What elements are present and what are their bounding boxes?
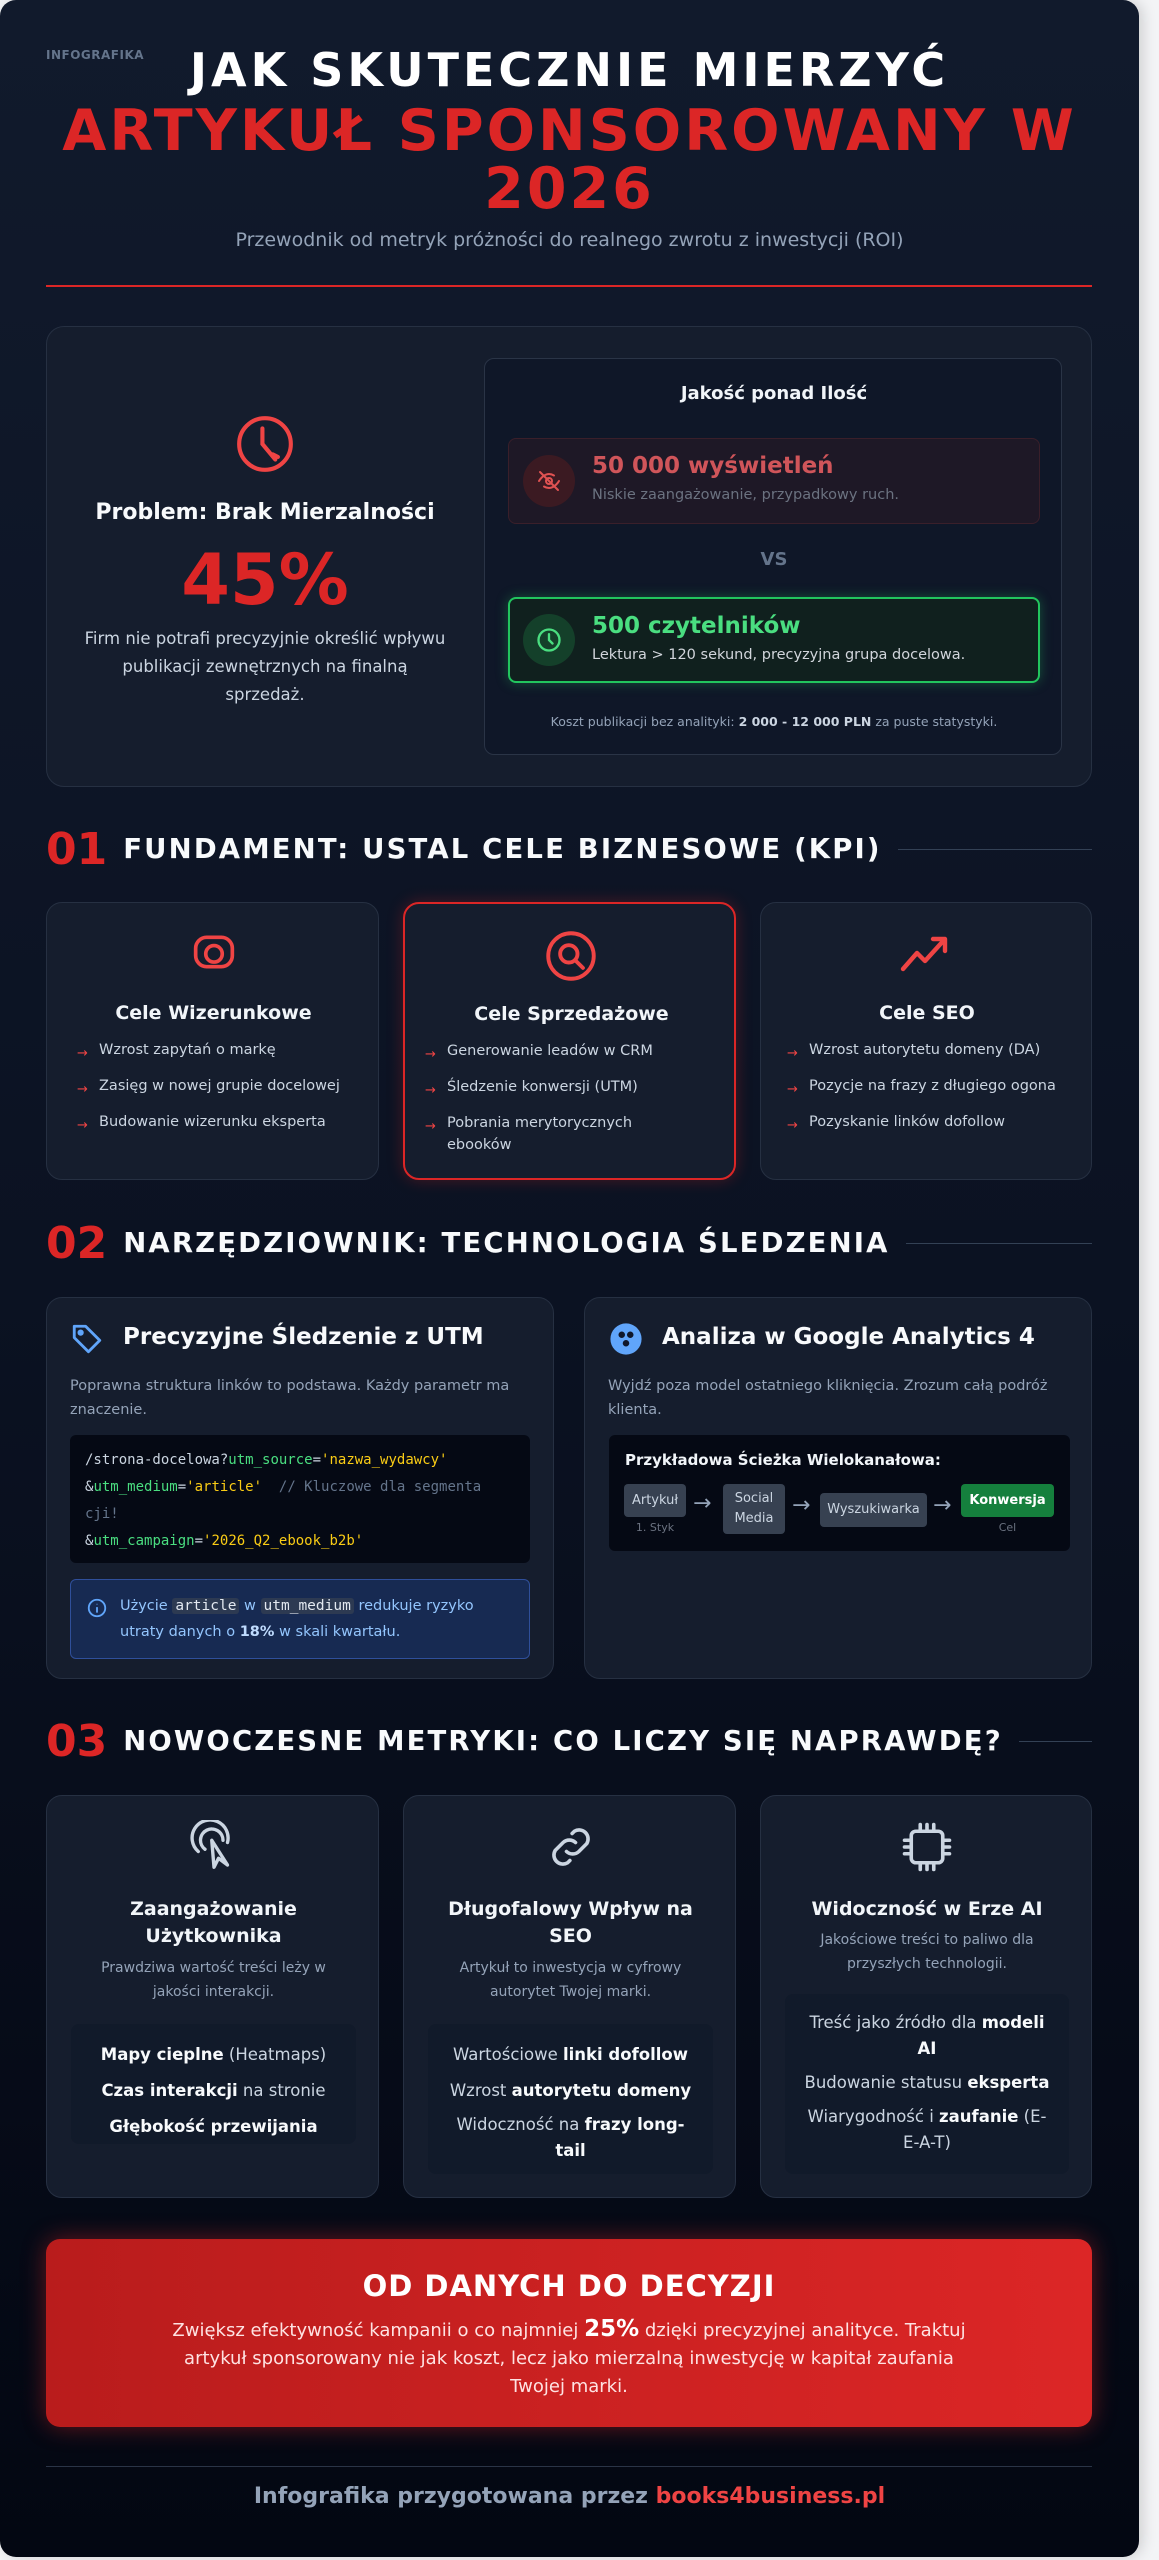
stat 45%: 45% — [181, 539, 349, 621]
path diagram: → — [792, 1493, 810, 1518]
code block: &utm_medium='article' // Kluczowe dla segmenta — [85, 1479, 481, 1495]
icon: eye off — [523, 455, 575, 507]
metric list: Głębokość przewijania — [109, 2117, 318, 2136]
cost note: Koszt publikacji bez analityki: 2 000 - 12 000 PLN za puste statystyki. — [551, 714, 997, 729]
panel: Cele SEO: Cele SEO — [879, 1002, 975, 1024]
callout: CTA — [46, 2239, 1092, 2427]
panel: Cele Wizerunkowe: Budowanie wizerunku eksperta — [99, 1114, 326, 1130]
panel: SEO impact — [403, 1795, 736, 2198]
section heading 03: 03 — [46, 1716, 107, 1766]
panel: Cele Sprzedażowe (highlighted) — [403, 902, 736, 1180]
icon: chip — [902, 1822, 952, 1872]
views box — [508, 438, 1040, 524]
panel: Cele Wizerunkowe — [46, 902, 379, 1180]
panel: UTM — [46, 1297, 554, 1679]
panel: AI visibility: Widoczność w Erze AI — [811, 1898, 1043, 1920]
panel: Zaangażowanie: Zaangażowanie Użytkownika — [130, 1898, 297, 1947]
panel: Zaangażowanie — [46, 1795, 379, 2198]
path diagram — [609, 1435, 1070, 1551]
panel: AI visibility: Jakościowe treści to paliwo dla przyszłych technologii. — [820, 1932, 1034, 1972]
path diagram: Cel — [999, 1521, 1016, 1534]
code block: &utm_campaign='2026_Q2_ebook_b2b' — [85, 1533, 363, 1549]
section heading 02: 02 — [46, 1218, 107, 1268]
info callout — [70, 1579, 530, 1659]
panel: Cele SEO: Pozyskanie linków dofollow — [809, 1114, 1005, 1130]
path diagram: Przykładowa Ścieżka Wielokanałowa: — [625, 1451, 941, 1469]
subtitle: Przewodnik od metryk próżności do realnego zwrotu z inwestycji (ROI) — [235, 229, 904, 251]
problem heading: Problem: Brak Mierzalności — [95, 500, 435, 525]
path diagram: Media — [734, 1511, 774, 1526]
panel: GA4: Wyjdź poza model ostatniego kliknięcia. Zrozum całą podróż klienta. — [608, 1378, 1048, 1418]
icon: search — [546, 931, 596, 981]
metric list: Wartościowe linki dofollow — [453, 2045, 688, 2064]
icon: pointer click — [190, 1820, 230, 1869]
icon: tag — [72, 1324, 102, 1354]
panel: UTM: Precyzyjne Śledzenie z UTM — [123, 1324, 484, 1350]
panel: SEO impact: Długofalowy Wpływ na SEO — [448, 1898, 693, 1947]
section heading 01: FUNDAMENT: USTAL CELE BIZNESOWE (KPI) — [123, 833, 882, 865]
panel: Zaangażowanie: Prawdziwa wartość treści leży w jakości interakcji. — [101, 1960, 326, 2000]
metric list — [71, 2024, 356, 2144]
problem description: publikacji zewnętrznych na finalną — [122, 657, 408, 676]
panel: Cele Wizerunkowe: Cele Wizerunkowe — [115, 1002, 312, 1024]
path diagram: → — [693, 1491, 711, 1516]
title: 2026 — [484, 156, 655, 222]
section heading 01: 01 — [46, 824, 107, 874]
icon: link — [552, 1828, 590, 1866]
vs: VS — [761, 549, 787, 570]
views box: Niskie zaangażowanie, przypadkowy ruch. — [592, 487, 899, 503]
readers box: 500 czytelników — [592, 613, 800, 639]
panel: Cele SEO: Wzrost autorytetu domeny (DA) — [809, 1042, 1040, 1058]
code block: cji! — [85, 1506, 119, 1522]
panel: Cele SEO: Pozycje na frazy z długiego ogona — [809, 1078, 1056, 1094]
path diagram: Artykuł — [632, 1493, 678, 1508]
metric list: Widoczność na frazy long-tail — [456, 2115, 685, 2160]
metric list: E-A-T) — [903, 2133, 951, 2152]
path diagram: Social — [735, 1491, 773, 1506]
path diagram: Wyszukiwarka — [827, 1502, 920, 1517]
icon: green clock — [523, 614, 575, 666]
metric list: Wzrost autorytetu domeny — [450, 2081, 691, 2100]
icon: trend up — [900, 936, 948, 972]
section heading 01 — [46, 824, 1092, 874]
section heading 02 — [46, 1218, 1092, 1268]
panel: Cele Wizerunkowe: Zasięg w nowej grupie docelowej — [99, 1078, 340, 1094]
comparison heading: Jakość ponad Ilość — [681, 383, 867, 404]
metric list: AI — [918, 2039, 936, 2058]
title: JAK SKUTECZNIE MIERZYĆ — [190, 43, 949, 97]
views box: 50 000 wyświetleń — [592, 453, 834, 479]
metric list: Czas interakcji na stronie — [101, 2081, 326, 2100]
panel: UTM: Poprawna struktura linków to podstawa. Każdy parametr ma znaczenie. — [70, 1378, 509, 1418]
callout: CTA: Zwiększ efektywność kampanii o co najmniej 25% dzięki precyzyjnej analityce. Traktuj artykuł sponsorowany nie jak koszt, lecz jako mierzalną inwestycję w kapitał zaufania Twojej marki. — [172, 2316, 966, 2397]
metric list — [785, 1994, 1069, 2174]
label: INFOGRAFIKA: INFOGRAFIKA — [46, 48, 144, 62]
path diagram: Konwersja — [969, 1493, 1046, 1508]
code block: /strona-docelowa?utm_source='nazwa_wydawcy' — [85, 1452, 447, 1468]
title — [62, 42, 1077, 222]
code block — [70, 1435, 530, 1563]
section heading 03: NOWOCZESNE METRYKI: CO LICZY SIĘ NAPRAWDĘ? — [123, 1725, 1003, 1757]
problem description: sprzedaż. — [225, 685, 305, 704]
problem description — [85, 629, 445, 704]
metric list: Wiarygodność i zaufanie (E- — [808, 2107, 1046, 2126]
section heading 03 — [46, 1716, 1092, 1766]
panel: Cele Wizerunkowe: Wzrost zapytań o markę — [99, 1042, 276, 1058]
info callout: Użycie article w utm_medium redukuje ryzyko utraty danych o 18% w skali kwartału. — [120, 1598, 474, 1640]
panel: Cele Sprzedażowe (highlighted): Śledzenie konwersji (UTM) — [447, 1079, 638, 1095]
metric list: Budowanie statusu eksperta — [805, 2073, 1049, 2092]
icon: analytics — [610, 1323, 642, 1355]
panel: Cele SEO — [760, 902, 1092, 1180]
panel: AI visibility — [760, 1795, 1092, 2198]
section heading 02: NARZĘDZIOWNIK: TECHNOLOGIA ŚLEDZENIA — [123, 1227, 890, 1259]
readers box — [508, 597, 1040, 683]
path diagram: 1. Styk — [636, 1521, 674, 1534]
panel: Cele Sprzedażowe (highlighted): Cele Sprzedażowe — [474, 1003, 669, 1025]
path diagram: → — [933, 1493, 951, 1518]
metric list: Mapy cieplne (Heatmaps) — [101, 2045, 326, 2064]
metric list — [428, 2024, 713, 2174]
problem description: Firm nie potrafi precyzyjnie określić wpływu — [85, 629, 445, 648]
panel: Cele Sprzedażowe (highlighted): Generowanie leadów w CRM — [447, 1043, 653, 1059]
panel: Cele Sprzedażowe (highlighted): Pobrania merytorycznych ebooków — [447, 1115, 632, 1153]
comparison box — [484, 358, 1062, 755]
panel: GA4: Analiza w Google Analytics 4 — [662, 1324, 1035, 1350]
icon: brand — [194, 936, 234, 968]
callout: CTA: OD DANYCH DO DECYZJI — [363, 2269, 775, 2303]
footer: Infografika przygotowana przez books4business.pl — [254, 2484, 885, 2509]
metric list: Treść jako źródło dla modeli — [809, 2013, 1045, 2032]
panel: problem & quality — [46, 326, 1092, 787]
panel: SEO impact: Artykuł to inwestycja w cyfrowy autorytet Twojej marki. — [460, 1960, 681, 2000]
icon: clock — [237, 416, 293, 472]
panel: GA4 — [584, 1297, 1092, 1679]
title: ARTYKUŁ SPONSOROWANY W — [62, 98, 1077, 164]
readers box: Lektura > 120 sekund, precyzyjna grupa docelowa. — [592, 647, 965, 663]
